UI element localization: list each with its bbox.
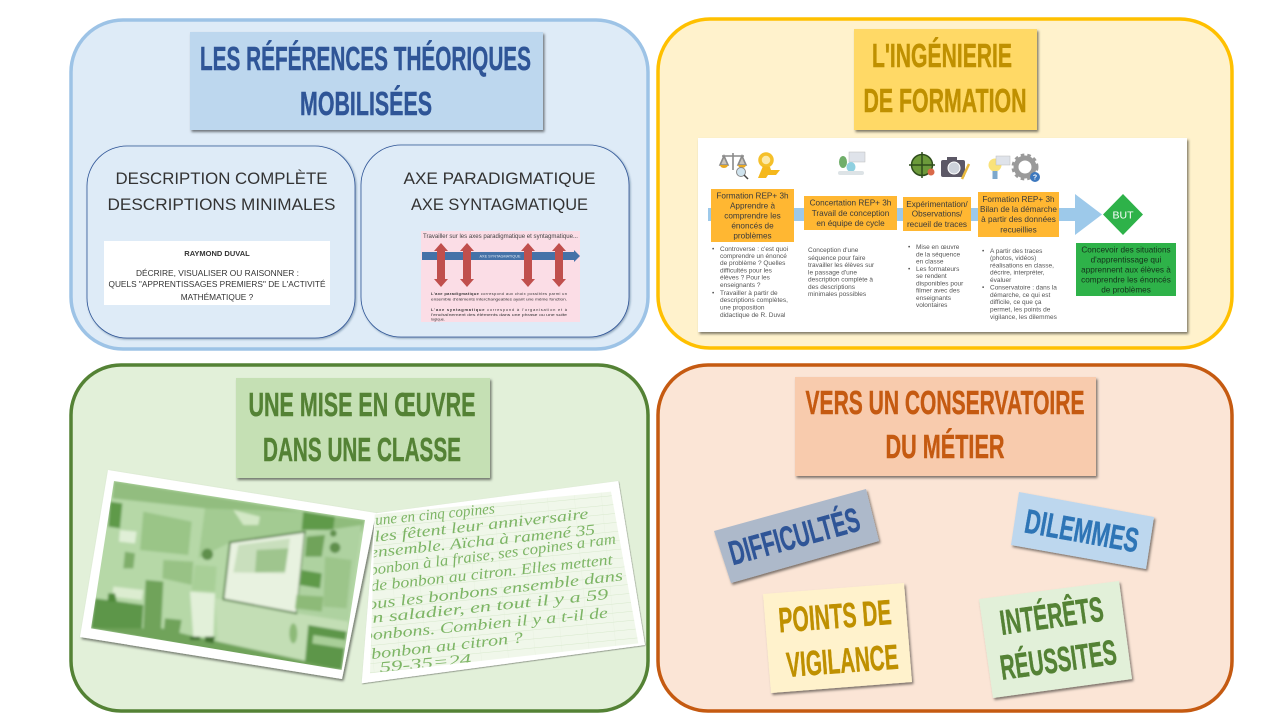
step 4: bilan: à partir des données — [981, 215, 1056, 224]
step 4 notes: vigilance, les dilemmes — [990, 314, 1058, 321]
step 3 notes: en classe — [916, 258, 944, 266]
panel: l'ingénierie de formation — [658, 19, 1232, 348]
goal box — [1076, 243, 1176, 296]
diagram: axes paradigmatique et syntagmatique: AXE SYNTAGMATIQUE — [480, 254, 521, 258]
step 3 notes: • — [908, 266, 911, 273]
heading: une mise en œuvre dans une classe — [236, 378, 490, 478]
step 2 notes: des descriptions — [808, 284, 856, 291]
handwriting: tous les bonbons ensemble dans — [360, 567, 624, 614]
step 1 notes: élèves ? Pour les — [720, 274, 771, 282]
icon: key — [758, 154, 780, 178]
step 4 notes: Conservatoire : dans la — [990, 284, 1057, 292]
sub-panel: axes: AXE PARADIGMATIQUE — [404, 169, 596, 188]
sticker: intérêts réussites: RÉUSSITES — [998, 632, 1119, 688]
step 3 notes: se rendent — [916, 273, 947, 280]
heading: l'ingénierie de formation — [854, 29, 1037, 130]
photo: handwritten problem — [360, 481, 645, 683]
step 2 notes: le passage d'une — [808, 270, 857, 276]
icon: balance — [720, 153, 748, 179]
step 1 notes: difficultés pour les — [720, 268, 773, 274]
step 3 notes: • — [908, 244, 911, 251]
diagram: axes paradigmatique et syntagmatique: L'axe syntagmatique correspond à l'organisation et à — [431, 307, 568, 312]
sticker: points de vigilance: VIGILANCE — [785, 638, 900, 685]
handwriting: bonbon à la fraise, ses copines a ram — [368, 531, 617, 579]
step 3: expérimentation: recueil de traces — [907, 220, 967, 229]
step 4 notes: A partir des traces — [990, 248, 1043, 255]
heading: les références théoriques mobilisées: MOBILISÉES — [300, 85, 432, 122]
heading: vers un conservatoire du métier: DU MÉTIER — [886, 428, 1005, 465]
step 2 notes: Conception d'une — [808, 247, 859, 254]
diamond: but — [1103, 194, 1143, 235]
icon: conversation — [838, 152, 865, 175]
sticker: points de vigilance: POINTS DE — [777, 593, 893, 640]
step 3: expérimentation: Expérimentation/ — [906, 200, 968, 209]
step 1: formation REP+ apprendre: comprendre les — [724, 212, 781, 220]
step 4 notes: (photos, vidéos) — [990, 255, 1036, 262]
handwriting — [360, 500, 624, 676]
sub-panel: axes — [361, 145, 629, 337]
sub-panel: descriptions: DESCRIPTIONS MINIMALES — [108, 195, 336, 214]
step 4 notes: • — [982, 284, 985, 292]
step 2 notes: séquence pour faire — [808, 255, 866, 262]
handwriting: un saladier, en tout il y a 59 — [360, 586, 610, 628]
step 3 notes — [908, 244, 964, 309]
goal box: de problèmes — [1101, 286, 1151, 294]
sub-panel: descriptions: DESCRIPTION COMPLÈTE — [116, 169, 328, 188]
heading: une mise en œuvre dans une classe: DANS UNE CLASSE — [263, 431, 461, 468]
icon: target — [909, 152, 935, 178]
step 4 notes: permet, les points de — [990, 306, 1051, 314]
step 1 notes: Travailler à partir de — [720, 290, 778, 297]
document title card: Raymond Duval: DÉCRIRE, VISUALISER OU RAISONNER : — [136, 268, 299, 278]
heading: vers un conservatoire du métier — [795, 377, 1096, 476]
step 1 notes: • — [712, 290, 715, 297]
panel: vers un conservatoire du métier — [658, 365, 1232, 711]
handwriting: une en cinq copines — [374, 500, 496, 529]
panel: les références théoriques — [71, 20, 648, 349]
step 1: formation REP+ apprendre — [711, 189, 794, 242]
step 1: formation REP+ apprendre: Apprendre à — [730, 202, 775, 210]
goal box: Concevoir des situations — [1081, 246, 1171, 254]
step 3 notes: enseignants — [916, 295, 952, 302]
diagram: axes paradigmatique et syntagmatique: L'axe paradigmatique correspond aux choix possibles parmi un — [431, 291, 567, 296]
step 4 notes: réalisations en classe, — [990, 262, 1054, 270]
step 1 notes: Controverse : c'est quoi — [720, 246, 788, 253]
handwriting: bonbons. Combien il y a t-il de — [362, 605, 609, 645]
sticker: points de vigilance — [763, 583, 912, 693]
handwriting: de bonbon au citron. Elles mettent — [370, 551, 614, 595]
step 3 notes: Les formateurs — [916, 266, 960, 273]
step 1: formation REP+ apprendre: énoncés de — [731, 222, 774, 230]
step 4 notes: décrire, interpréter, — [990, 270, 1045, 276]
diagram: axes paradigmatique et syntagmatique: Travailler sur les axes paradigmatique et syntagmatique... — [423, 234, 578, 240]
icon: gear with question mark: ? — [1033, 174, 1037, 182]
step 2: concertation: Concertation REP+ 3h — [810, 198, 892, 208]
diagram: axes paradigmatique et syntagmatique: l'enchaînement des éléments dans une phrase ou une suite — [431, 312, 568, 317]
diagram: axes paradigmatique et syntagmatique — [421, 231, 580, 322]
step 4 notes: • — [982, 248, 985, 255]
step 1: formation REP+ apprendre: Formation REP+ 3h — [716, 192, 789, 200]
document title card: Raymond Duval: RAYMOND DUVAL — [184, 249, 250, 258]
step 1 notes — [712, 246, 788, 319]
step 2: concertation — [804, 196, 897, 230]
goal box: apprennent aux élèves à — [1081, 266, 1171, 274]
step 4 notes: évaluer — [990, 277, 1012, 284]
icon: light bulb — [988, 156, 1010, 179]
photo: classroom — [75, 465, 376, 685]
diagram: axes paradigmatique et syntagmatique: ensemble d'éléments interchangeables ayant une même fonction. — [431, 296, 567, 302]
step 1 notes: descriptions complètes, — [720, 297, 788, 304]
step 3 notes: Mise en œuvre — [916, 244, 960, 251]
step 1 notes: didactique de R. Duval — [720, 312, 786, 319]
step 3 notes: de la séquence — [916, 252, 960, 258]
step 4: bilan: Formation REP+ 3h — [982, 195, 1055, 204]
heading: les références théoriques mobilisées — [190, 32, 543, 130]
document title card: Raymond Duval — [104, 241, 330, 305]
step 2 notes: description complète à — [808, 276, 873, 284]
heading: vers un conservatoire du métier: VERS UN CONSERVATOIRE — [806, 384, 1084, 421]
icon: camera — [941, 157, 969, 179]
goal box: d'apprentissage qui — [1091, 256, 1162, 264]
heading: l'ingénierie de formation: DE FORMATION — [864, 82, 1026, 119]
icon: gear with question mark — [1013, 155, 1040, 182]
step 4 notes — [982, 248, 1058, 321]
goal box: comprendre les énoncés — [1081, 276, 1171, 284]
step 1 notes: enseignants ? — [720, 282, 761, 289]
document title card: Raymond Duval: QUELS "APPRENTISSAGES PREMIERS" DE L'ACTIVITÉ — [108, 279, 326, 289]
diagram: axes paradigmatique et syntagmatique: logique. — [431, 316, 445, 322]
step 3 notes: filmer avec des — [916, 288, 960, 294]
step 3: expérimentation: Observations/ — [912, 210, 963, 218]
diamond: but: BUT — [1112, 210, 1134, 222]
sticker: dilemmes: DILEMMES — [1022, 503, 1142, 560]
sub-panel: descriptions — [87, 146, 355, 338]
panel: une mise en œuvre dans une classe — [71, 365, 648, 711]
handwriting: bonbon au citron ? — [370, 629, 524, 663]
step 3: expérimentation — [903, 197, 971, 231]
step 4: bilan — [978, 192, 1059, 237]
step 1: formation REP+ apprendre: problèmes — [733, 232, 772, 240]
step 4: bilan: Bilan de la démarche — [980, 205, 1057, 214]
step 1 notes: comprendre un énoncé — [720, 253, 787, 260]
step 2 notes: minimales possibles — [808, 291, 867, 298]
handwriting: ensemble. Aïcha à ramené 35 — [369, 521, 596, 562]
sticker: difficultés — [714, 489, 879, 583]
heading: l'ingénierie de formation: L'INGÉNIERIE — [872, 37, 1012, 74]
step 2 notes — [808, 247, 875, 298]
timeline card: démarche de formation — [698, 138, 1187, 332]
step 4 notes: difficile, ce que ça — [990, 299, 1042, 306]
sticker: difficultés: DIFFICULTÉS — [725, 501, 864, 573]
step 3 notes: volontaires — [916, 302, 948, 309]
step 1 notes: une proposition — [720, 304, 765, 312]
document title card: Raymond Duval: MATHÉMATIQUE ? — [181, 292, 254, 302]
step 2 notes: travailler les élèves sur — [808, 262, 875, 269]
step 2: concertation: en équipe de cycle — [816, 219, 885, 228]
sticker: dilemmes — [1011, 492, 1154, 569]
step 4 notes: démarche, ce qui est — [990, 292, 1051, 299]
sub-panel: axes: AXE SYNTAGMATIQUE — [411, 195, 588, 214]
heading: une mise en œuvre dans une classe: UNE MISE EN ŒUVRE — [248, 386, 476, 423]
handwriting: les fêtent leur anniversaire — [374, 505, 589, 546]
handwriting: 59-35=24 — [379, 651, 472, 676]
timeline band and arrow — [708, 194, 1102, 235]
step 4: bilan: recueillies — [1000, 226, 1037, 234]
sticker: intérêts réussites — [979, 581, 1132, 698]
sticker: intérêts réussites: INTÉRÊTS — [997, 589, 1106, 643]
step 1 notes: de problème ? Quelles — [720, 260, 786, 267]
step 2: concertation: Travail de conception — [812, 209, 890, 218]
step 3 notes: disponibles pour — [916, 280, 964, 288]
step 1 notes: • — [712, 246, 715, 253]
heading: les références théoriques mobilisées: LES RÉFÉRENCES THÉORIQUES — [200, 40, 531, 77]
